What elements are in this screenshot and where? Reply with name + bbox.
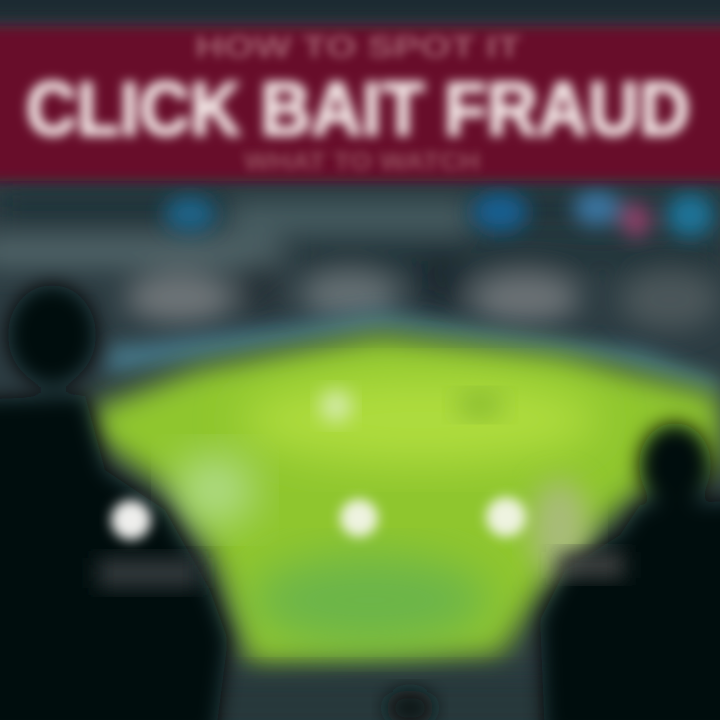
stand colour accents: blue and pink seats [164,190,714,238]
silhouette: left spectator [0,285,228,720]
silhouette: right spectator [540,423,720,720]
football pitch [90,335,720,665]
marker: left dot with caption bar [98,500,198,588]
banner [0,26,720,181]
marker: right dot with caption bar [486,497,624,578]
marker: centre dot [340,499,378,537]
pitch-side blue advertising boards [105,312,720,395]
lower stand below the pitch [200,675,560,720]
banner eyebrow text: HOW TO SPOT IT [195,29,521,64]
top strip above the banner [0,0,720,18]
banner subtitle text: WHAT TO WATCH [244,148,480,176]
small dark figure at bottom centre [386,690,434,720]
marker: far pitch dot [320,390,352,422]
